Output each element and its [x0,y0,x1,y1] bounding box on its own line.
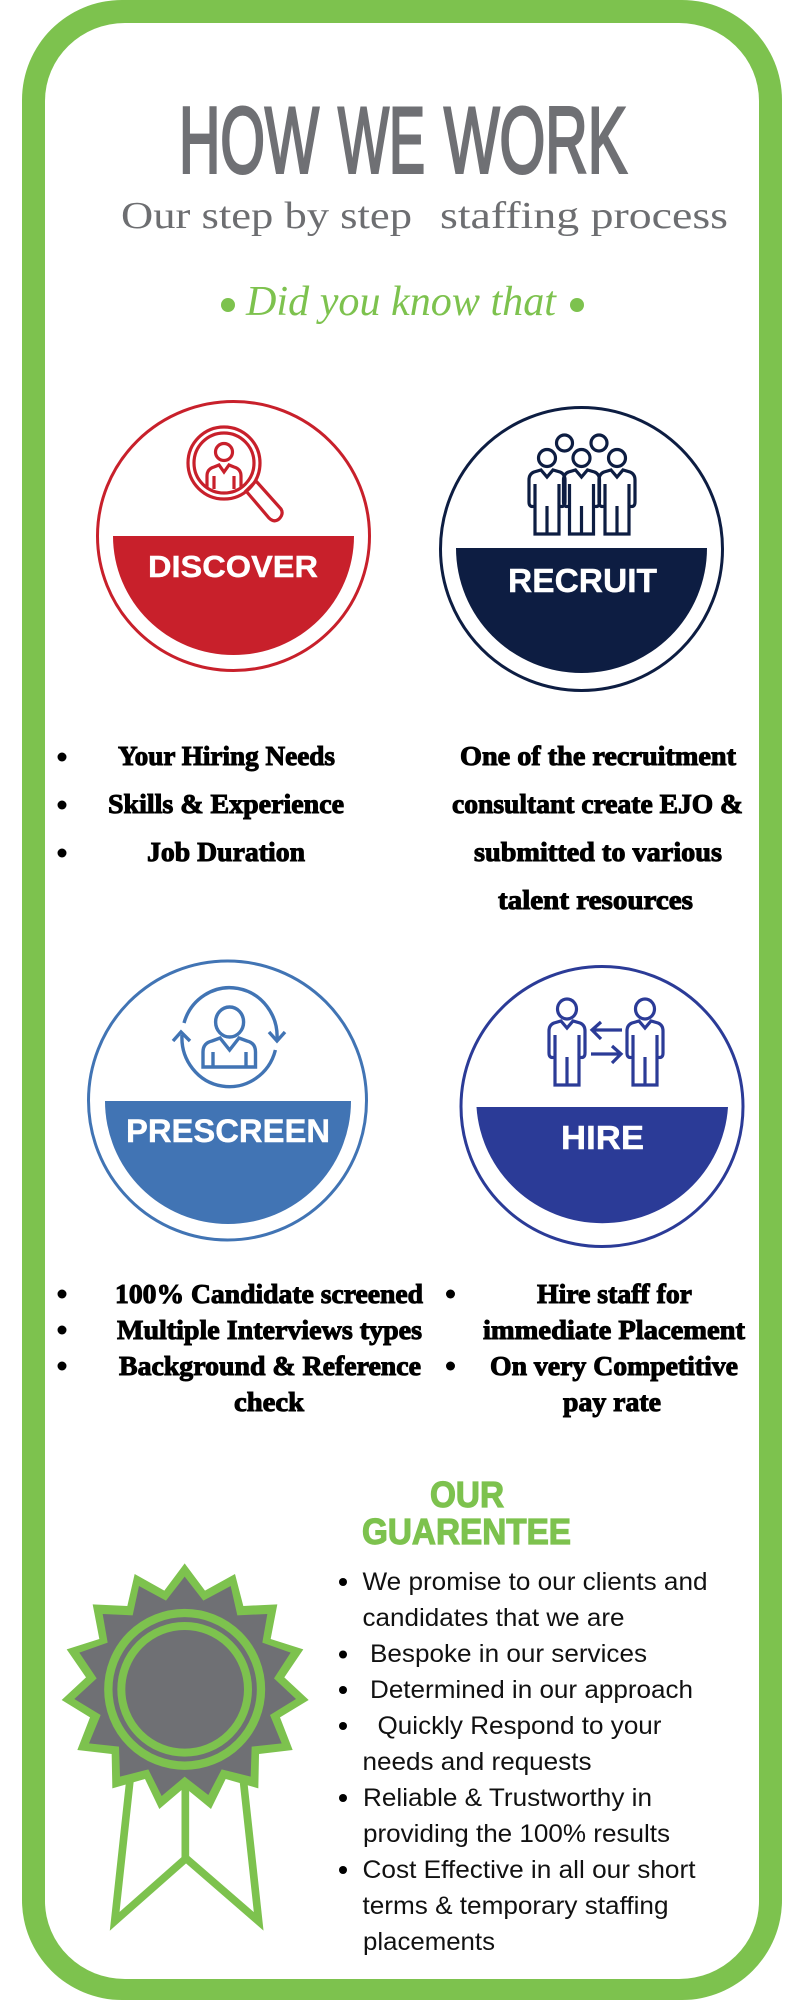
label: hire: HIRE [561,1119,644,1156]
list: prescreen points: 100% Candidate screened [115,1279,423,1309]
list: hire points: Hire staff for [537,1279,692,1309]
label: discover: DISCOVER [148,549,318,584]
list: discover points [58,741,344,867]
icon: group of people [529,435,635,534]
did you know heading: Did you know that [245,279,557,325]
list: guarantee promises: providing the 100% results [363,1820,670,1848]
list: guarantee promises: We promise to our clients and [362,1568,708,1596]
subtitle [121,195,728,237]
list: hire points: pay rate [563,1387,661,1417]
list: prescreen points: Multiple Interviews types [117,1315,422,1345]
text: recruit description: One of the recruitment [460,741,736,771]
list: guarantee promises: needs and requests [362,1748,592,1776]
list: guarantee promises: Cost Effective in all our short [362,1856,696,1884]
list: discover points: Skills & Experience [108,789,344,819]
text: recruit description: submitted to various [474,837,722,867]
badge: prescreen [88,961,366,1240]
icon: two people exchanging [549,999,663,1085]
heading: our guarentee [362,1474,571,1552]
icon: magnifier with person [188,427,282,521]
title: HOW [179,88,319,192]
badge: discover [98,402,370,670]
icon: award rosette [62,1563,309,1921]
title: WE [338,88,425,192]
icon: person in cycle arrows [173,988,285,1087]
title [179,88,627,192]
label: recruit: RECRUIT [508,562,657,599]
subtitle: Our step by step [121,195,412,237]
heading: our guarentee: OUR [430,1474,504,1515]
list: guarantee promises: Determined in our approach [370,1676,693,1704]
list: guarantee promises: terms & temporary staffing [362,1892,668,1920]
badge: hire [461,966,743,1246]
list: hire points [446,1279,745,1417]
list: hire points: On very Competitive [490,1351,738,1381]
list: guarantee promises: candidates that we are [362,1604,624,1632]
text: recruit description: talent resources [498,885,693,915]
list: discover points: Your Hiring Needs [118,741,335,771]
list: guarantee promises: Bespoke in our services [370,1640,647,1668]
list: prescreen points: check [234,1387,304,1417]
list: prescreen points: Background & Reference [119,1351,421,1381]
list: prescreen points [58,1279,423,1417]
text: recruit description [452,741,743,915]
title: WORK [444,88,627,192]
subtitle: staffing process [440,195,728,237]
list: hire points: immediate Placement [483,1315,745,1345]
heading: our guarentee: GUARENTEE [362,1511,571,1552]
list: discover points: Job Duration [147,837,305,867]
ribbon tails [115,1780,259,1921]
list: guarantee promises: Reliable & Trustworthy in [363,1784,652,1812]
list: guarantee promises: Quickly Respond to your [378,1712,662,1740]
rosette star [62,1563,309,1809]
text: recruit description: consultant create EJO & [452,789,743,819]
label: prescreen: PRESCREEN [126,1113,330,1149]
badge: recruit [440,408,722,690]
list: guarantee promises [339,1568,708,1956]
list: guarantee promises: placements [363,1928,495,1956]
